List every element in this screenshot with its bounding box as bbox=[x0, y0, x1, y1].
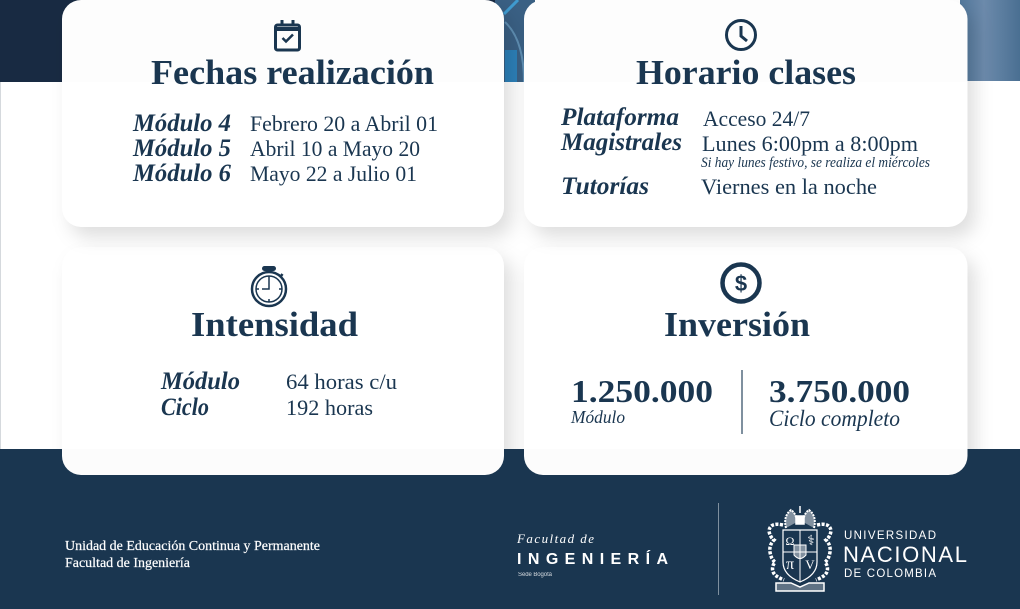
schedule list: Tutorías bbox=[561, 173, 649, 200]
hours list: Ciclo bbox=[161, 394, 209, 421]
panel: inversión bbox=[524, 247, 968, 475]
schedule list bbox=[560, 104, 930, 200]
dates list: Febrero 20 a Abril 01 bbox=[250, 111, 438, 136]
footer text: unidad bbox=[65, 539, 320, 571]
icon: dollar coin bbox=[722, 264, 760, 302]
icon: calendar bbox=[275, 20, 300, 50]
dates list bbox=[132, 110, 438, 187]
dates list: Mayo 22 a Julio 01 bbox=[250, 161, 417, 186]
schedule list: Viernes en la noche bbox=[701, 174, 877, 199]
logo: university shield: V bbox=[805, 557, 815, 572]
schedule list: Acceso 24/7 bbox=[703, 106, 810, 131]
price: módulo: Módulo bbox=[570, 407, 625, 427]
price: módulo: 1.250.000 bbox=[571, 373, 713, 409]
eagle bbox=[785, 510, 815, 528]
price: ciclo completo bbox=[769, 373, 910, 431]
ribbon bbox=[776, 583, 824, 591]
card shadows, upper row bbox=[70, 10, 975, 237]
panel: intensidad bbox=[62, 247, 504, 475]
footer divider bbox=[718, 503, 719, 595]
shield outline and cross bbox=[783, 530, 817, 582]
logo: facultad de ingeniería: Facultad de bbox=[516, 531, 594, 546]
logo: facultad de ingeniería: Sede Bogotá bbox=[518, 572, 553, 578]
hours list: 64 horas c/u bbox=[286, 369, 397, 394]
dates list: Módulo 4 bbox=[132, 110, 231, 137]
panel: horario clases bbox=[524, 0, 968, 227]
logo: facultad de ingeniería bbox=[516, 531, 668, 578]
icon: clock bbox=[726, 20, 756, 50]
card shadows, lower row bbox=[70, 257, 975, 485]
schedule list: Magistrales bbox=[560, 129, 682, 156]
logo: universidad nacional wordmark: NACIONAL bbox=[843, 542, 967, 567]
heading: Inversión: Inversión bbox=[664, 305, 810, 344]
heading: Intensidad: Intensidad bbox=[191, 305, 359, 344]
logo: universidad nacional wordmark bbox=[843, 530, 967, 580]
heading: Fechas realización: Fechas realización bbox=[151, 53, 434, 92]
logo: university shield: ⚕ bbox=[807, 534, 815, 549]
left page edge bbox=[0, 82, 1, 449]
dates list: Módulo 5 bbox=[132, 135, 231, 162]
logo: universidad nacional wordmark: DE COLOMBIA bbox=[844, 568, 936, 580]
header band bbox=[0, 0, 1020, 82]
price: ciclo completo: Ciclo completo bbox=[769, 406, 900, 431]
footer text: unidad: Facultad de Ingeniería bbox=[65, 556, 191, 571]
price divider bbox=[741, 370, 743, 434]
hours list: Módulo bbox=[160, 368, 240, 395]
schedule list: Si hay lunes festivo, se realiza el miércoles bbox=[701, 155, 930, 171]
central escutcheon bbox=[794, 545, 806, 558]
footer band bbox=[0, 449, 1020, 609]
logo: universidad nacional wordmark: UNIVERSIDAD bbox=[844, 530, 936, 542]
panel: fechas realización bbox=[62, 0, 504, 227]
heading: Horario clases: Horario clases bbox=[636, 53, 856, 92]
logo: university shield bbox=[769, 506, 831, 591]
dates list: Módulo 6 bbox=[132, 160, 231, 187]
price: módulo bbox=[570, 373, 713, 427]
schedule list: Plataforma bbox=[560, 104, 679, 131]
icon: stopwatch bbox=[252, 268, 286, 306]
dates list: Abril 10 a Mayo 20 bbox=[250, 136, 420, 161]
schedule list: Lunes 6:00pm a 8:00pm bbox=[702, 131, 918, 156]
hours list bbox=[160, 368, 397, 421]
footer text: unidad: Unidad de Educación Continua y Permanente bbox=[65, 539, 320, 554]
icon: dollar coin: $ bbox=[735, 271, 747, 296]
laurel wreaths bbox=[769, 524, 784, 580]
shield glyphs: Ω bbox=[786, 534, 795, 548]
hours list: 192 horas bbox=[286, 395, 373, 420]
logo: facultad de ingeniería: INGENIERÍA bbox=[517, 549, 668, 568]
logo: university shield: π bbox=[786, 556, 794, 573]
price: ciclo completo: 3.750.000 bbox=[769, 373, 910, 409]
